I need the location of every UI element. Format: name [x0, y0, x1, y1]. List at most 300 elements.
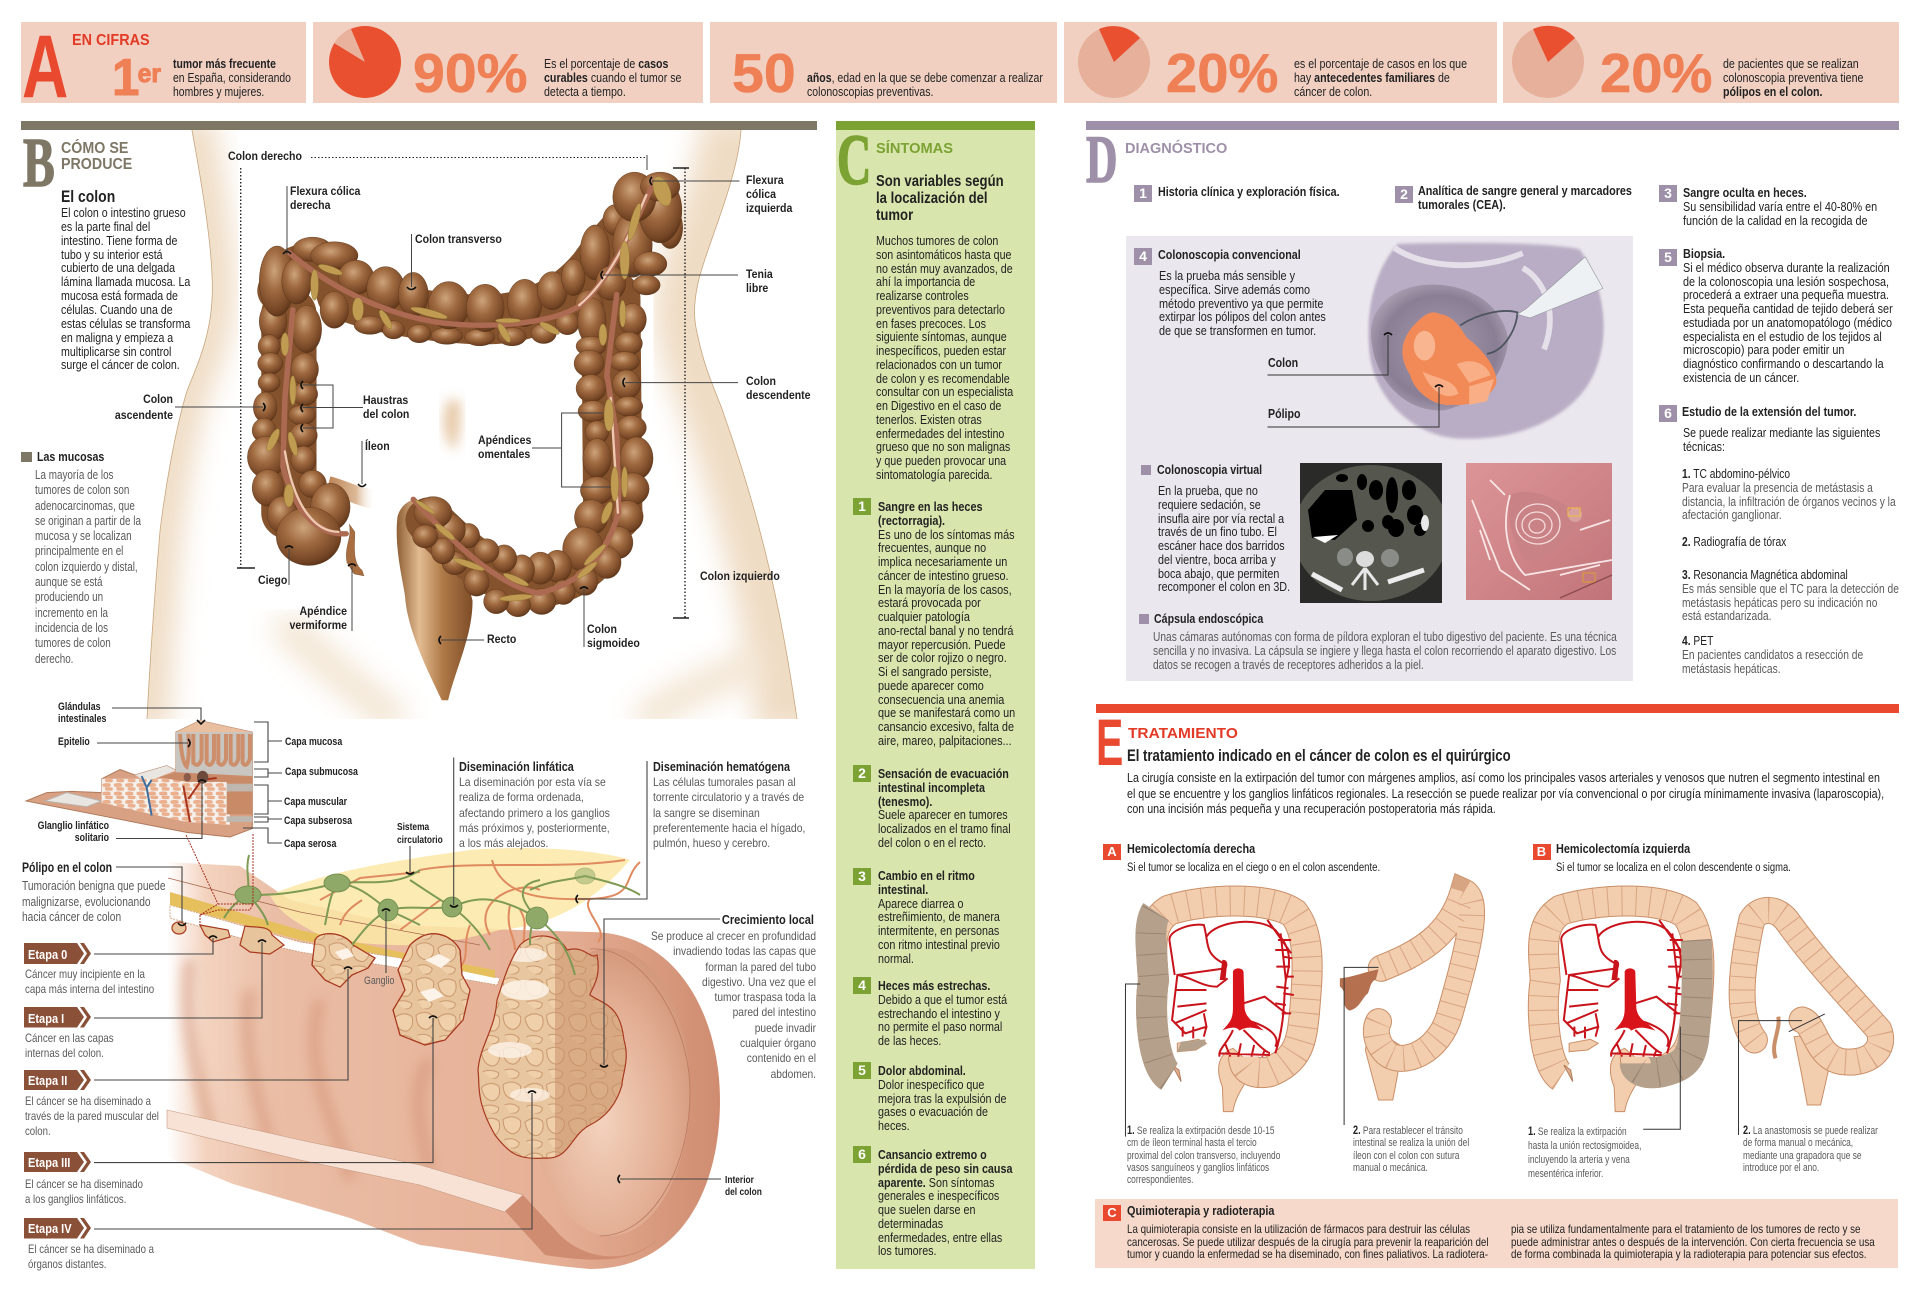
symptom 1: que se manifestará como un [878, 706, 1015, 720]
text diseminación hematógena: preferentemente hacia el hígado, [653, 821, 805, 835]
text crecimiento local: abdomen. [770, 1067, 816, 1081]
vessels [1169, 920, 1294, 1057]
text intro: de colon y es recomendable [876, 372, 1010, 386]
subheading: tumor [876, 207, 913, 224]
colon labels leader lines [175, 155, 740, 647]
text intro: son asintomáticos hasta que [876, 248, 1011, 262]
illustration: cross-section of colon with tumour stages [24, 708, 721, 1269]
apéndices omentales [264, 174, 675, 602]
diagram A1: right hemicolectomy [1152, 901, 1307, 1112]
badge etapa III: Etapa III [28, 1155, 70, 1170]
text crecimiento local: digestivo. Una vez que el [702, 975, 816, 989]
text técnicas: técnicas: [1683, 440, 1725, 454]
item sangre oculta: Sangre oculta en heces. [1683, 186, 1807, 200]
stat text pólipos: colonoscopia preventiva tiene [1723, 70, 1863, 85]
heading cómo se produce: CÓMO SE [61, 140, 128, 157]
number 5: 5 [1664, 249, 1672, 265]
text etapa III [25, 1177, 143, 1206]
text cápsula endoscópica: sencilla y no invasiva. La cápsula se ingiere y llega hasta el colon recorriendo el aparato digestivo. Los [1153, 644, 1616, 658]
stat text antecedentes familiares [1294, 56, 1467, 99]
text colonoscopia virtual: recomponer el colon en 3D. [1158, 580, 1290, 594]
label apéndices omentales [478, 433, 531, 461]
diagram B1: left hemicolectomy [1543, 901, 1699, 1112]
heading colonoscopia virtual: Colonoscopia virtual [1157, 463, 1262, 477]
symptom 3: con ritmo intestinal previo [878, 938, 1000, 952]
heading cómo se produce [61, 139, 132, 173]
text intro: enfermedades del intestino [876, 427, 1004, 441]
text etapa II: través de la pared muscular del [25, 1109, 159, 1123]
text intro: y que pueden provocar una [876, 454, 1006, 468]
text intro: realizarse controles [876, 289, 969, 303]
text el colon: es la parte final del [61, 220, 150, 234]
number 6 [1659, 405, 1677, 422]
label glanglio linfático solitario [38, 820, 109, 844]
symptom 1: Es uno de los síntomas más [878, 528, 1015, 542]
polyp [172, 922, 186, 934]
technique 1: distancia, la infiltración de órganos vecinos y la [1682, 494, 1896, 508]
text colonoscopia virtual: escáner hace dos barridos [1158, 539, 1284, 553]
number 3 [853, 868, 871, 885]
letter D: D [1086, 121, 1117, 197]
symptom 3: intestinal. [878, 883, 928, 897]
text tratamiento: el que se encuentre y los ganglios linfáticos regionales. La resección se puede realizar por vía convencional o por cirugía mínimamente invasiva (laparoscopia), [1127, 786, 1884, 800]
text el colon: tubo y su interior está [61, 248, 163, 262]
symptom 1: Si el sangrado persiste, [878, 665, 992, 679]
letter A square: A [1107, 844, 1117, 859]
symptom 1: ser de color rojizo o negro. [878, 651, 1007, 665]
text crecimiento local: puede invadir [754, 1021, 816, 1035]
text diseminación linfática: más próximos y, posteriormente, [459, 821, 610, 835]
stat text antecedentes familiares: cáncer de colon. [1294, 84, 1372, 99]
text el colon: mucosa está formada de [61, 289, 178, 303]
item sangre oculta: función de la calidad en la recogida de [1683, 214, 1868, 228]
caption B1: incluyendo la arteria y vena [1528, 1154, 1630, 1166]
symptom 1: Sangre en las heces [878, 500, 983, 514]
text diseminación hematógena: pulmón, hueso y cerebro. [653, 836, 770, 850]
caption B2: de forma manual o mecánica, [1743, 1137, 1853, 1149]
symptom 1: mayor repercusión. Puede [878, 638, 1006, 652]
text el colon: cubierto de una delgada [61, 261, 175, 275]
purple header bar [1086, 121, 1899, 130]
mucosal strip [167, 1110, 523, 1212]
label recto: Recto [487, 632, 516, 646]
number 6 [853, 1146, 871, 1163]
text el colon: estas células se transforma [61, 317, 190, 331]
text diseminación linfática: afectando primero a los ganglios [459, 806, 610, 820]
label apéndice vermiforme [289, 604, 347, 632]
symptom 1: cualquier patología [878, 610, 970, 624]
number 2 [853, 765, 871, 782]
text colonoscopia convencional: extirpar los pólipos del colon antes [1158, 310, 1325, 324]
number 6: 6 [1664, 405, 1672, 421]
heading hemicolectomía derecha: Hemicolectomía derecha [1126, 842, 1255, 856]
label apéndice vermiforme: vermiforme [289, 618, 347, 632]
label flexura cólica izquierda: cólica [746, 187, 775, 201]
caption A2: íleon con el colon con sutura [1353, 1150, 1459, 1162]
symptom 1: puede aparecer como [878, 679, 984, 693]
number 2: 2 [858, 765, 866, 781]
number 3 [1659, 185, 1677, 202]
symptom 6: generales e inespecíficos [878, 1189, 999, 1203]
label tenia libre: Tenia [746, 267, 772, 281]
number 2: 2 [1400, 186, 1408, 202]
stat 50: 50 [732, 43, 796, 104]
text crecimiento local: pared del intestino [732, 1005, 816, 1019]
stat text curables: Es el porcentaje de casos [544, 56, 668, 71]
item biopsia: estudiada por un anatomopatólogo (médico [1683, 316, 1892, 330]
text el colon: multiplicarse sin control [61, 345, 171, 359]
symptom 6: Cansancio extremo o [878, 1148, 987, 1162]
text etapa I: Cáncer en las capas [25, 1031, 114, 1045]
colon body backing [279, 203, 650, 585]
stat text curables [544, 56, 681, 99]
symptom 2: Sensación de evacuación [878, 767, 1009, 781]
square bullet las mucosas [21, 452, 32, 462]
symptom 3 [878, 869, 1000, 966]
label flexura cólica derecha: derecha [290, 198, 331, 212]
diagnosis leader lines [1268, 333, 1443, 427]
item analítica: tumorales (CEA). [1418, 198, 1506, 212]
label haustras del colon: Haustras [363, 393, 408, 407]
symptom 1: ano-rectal banal y no tendrá [878, 624, 1013, 638]
symptom 1: aire, mareo, palpitaciones... [878, 734, 1012, 748]
text las mucosas: tumores de colon [35, 636, 111, 650]
caption B2: 2. La anastomosis se puede realizar [1743, 1123, 1878, 1137]
heading las mucosas: Las mucosas [37, 450, 104, 464]
text etapa 0: capa más interna del intestino [25, 982, 154, 996]
ring of the tube end [530, 948, 690, 1236]
technique 4: 4. PET [1682, 634, 1713, 648]
number 5 [853, 1062, 871, 1079]
label colon ascendente: Colon [143, 392, 173, 406]
label interior del colon: Interior [725, 1174, 754, 1186]
label colon descendente: Colon [746, 374, 775, 388]
text las mucosas: aunque se está [35, 575, 103, 589]
text diseminación linfática: realiza de forma ordenada, [459, 790, 584, 804]
text las mucosas: mucosa y se localizan [35, 529, 132, 543]
item biopsia: microscopio) para poder emitir un [1683, 343, 1844, 357]
text etapa II: colon. [25, 1124, 51, 1138]
technique 3: metástasis hepáticas pero su indicación no [1682, 596, 1877, 610]
symptom 1: estará provocada por [878, 596, 981, 610]
text intro: ahí la importancia de [876, 275, 975, 289]
label apéndices omentales: Apéndices [478, 433, 531, 447]
text las mucosas: incidencia de los [35, 621, 108, 635]
text el colon: lámina llamada mucosa. La [61, 275, 190, 289]
number 1 [853, 498, 871, 515]
symptom 2: localizados en el tramo final [878, 822, 1011, 836]
text etapa II: El cáncer se ha diseminado a [25, 1094, 151, 1108]
text colonoscopia convencional: Es la prueba más sensible y [1158, 269, 1295, 283]
text tratamiento: La cirugía consiste en la extirpación del tumor con márgenes amplios, así como los principales vasos arteriales y venosos que nutren el segmento intestinal en [1127, 770, 1880, 785]
label capa muscular: Capa muscular [284, 796, 347, 808]
caption B2: introduce por el ano. [1743, 1162, 1819, 1174]
caption A2 [1353, 1124, 1469, 1174]
red dotted zoom lines [186, 834, 253, 925]
tumours [172, 922, 470, 1045]
label sistema circulatorio: circulatorio [397, 834, 443, 846]
panel: tratamiento [1095, 704, 1899, 1269]
technique 3: está estandarizada. [1682, 609, 1771, 623]
letter B square: B [1537, 844, 1546, 859]
caption A2: intestinal se realiza la unión del [1353, 1137, 1469, 1149]
text colonoscopia virtual: En la prueba, que no [1158, 484, 1257, 498]
text las mucosas: colon izquierdo y distal, [35, 560, 138, 574]
technique 3: Es más sensible que el TC para la detección de [1682, 582, 1899, 596]
caption A1: vasos sanguíneos y ganglios linfáticos [1127, 1162, 1269, 1174]
number 5: 5 [858, 1062, 866, 1078]
symptom 6: determinadas [878, 1217, 943, 1231]
text etapa IV: El cáncer se ha diseminado a [28, 1242, 154, 1256]
panel: síntomas [836, 121, 1035, 1269]
label flexura cólica izquierda [746, 173, 792, 214]
stat text curables: detecta a tiempo. [544, 84, 626, 99]
diagram leaders [1125, 967, 1802, 1137]
technique 1: afectación ganglionar. [1682, 508, 1782, 522]
text el colon: células. Cuando una de [61, 303, 173, 317]
heading crecimiento local: Crecimiento local [722, 912, 814, 927]
text diseminación hematógena: Diseminación hematógena [653, 760, 790, 774]
label flexura cólica izquierda: izquierda [746, 200, 792, 214]
text intro: inespecíficos, pueden estar [876, 344, 1006, 358]
symptom 5: mejora tras la expulsión de [878, 1092, 1006, 1106]
symptom 2: (tenesmo). [878, 794, 932, 808]
square bullet cápsula endoscópica [1139, 614, 1149, 624]
label capa serosa: Capa serosa [284, 838, 336, 850]
caption B1: mesentérica inferior. [1528, 1168, 1603, 1180]
text intro [876, 234, 1014, 482]
text intro: Muchos tumores de colon [876, 234, 998, 248]
heading cápsula endoscópica: Cápsula endoscópica [1154, 612, 1263, 626]
text etapa I [25, 1031, 114, 1060]
text quimioterapia column 1: tumor y cuando la enfermedad se ha diseminado, con fines paliativos. La radiotera- [1127, 1247, 1488, 1261]
heading colonoscopia convencional: Colonoscopia convencional [1158, 248, 1300, 262]
text las mucosas: incremento en la [35, 606, 108, 620]
item biopsia: Biopsia. [1683, 247, 1725, 261]
text diseminación linfática: La diseminación por esta vía se [459, 775, 606, 789]
subheading [876, 173, 1004, 224]
symptom 4: no permite el paso normal [878, 1020, 1002, 1034]
caption A2: 2. Para restablecer el tránsito [1353, 1123, 1463, 1137]
text colonoscopia convencional: específica. Sirve además como [1158, 283, 1310, 297]
stat text pólipos: pólipos en el colon. [1723, 84, 1823, 99]
label colon descendente: descendente [746, 388, 810, 402]
technique 1 [1682, 468, 1896, 523]
text intro: tenerlos. Existen otras [876, 413, 982, 427]
texture of stage II and III tumours [312, 934, 470, 1045]
text etapa III: El cáncer se ha diseminado [25, 1177, 143, 1191]
stat text tumor más frecuente: en España, considerando [173, 70, 291, 85]
symptom 1: implica necesariamente un [878, 555, 1007, 569]
symptom 2: del colon o en el recto. [878, 836, 986, 850]
heading en cifras: EN CIFRAS [72, 32, 150, 49]
technique 4: metástasis hepáticas. [1682, 662, 1781, 676]
symptom 3: Aparece diarrea o [878, 896, 963, 910]
label colon ascendente [115, 392, 173, 422]
diagram A2: anastomosis [1340, 892, 1472, 1100]
heading síntomas: SÍNTOMAS [876, 141, 953, 157]
text diseminación linfática [459, 760, 610, 850]
text crecimiento local: contenido en el [746, 1051, 816, 1065]
label sistema circulatorio [397, 821, 443, 846]
stage IV tumour [478, 936, 616, 1158]
symptom 1: En la mayoría de los casos, [878, 582, 1012, 596]
text cápsula endoscópica: datos se recogen a través de receptores adheridos a la piel. [1153, 658, 1424, 672]
tube folds [187, 960, 430, 1180]
caption B1: 1. Se realiza la extirpación [1528, 1124, 1627, 1138]
item sangre oculta [1683, 187, 1877, 228]
symptom 6: los tumores. [878, 1244, 937, 1258]
letter A: A [22, 16, 68, 116]
caption A1: correspondientes. [1127, 1174, 1193, 1186]
text etapa III: a los ganglios linfáticos. [25, 1192, 126, 1206]
label glanglio linfático solitario: solitario [75, 832, 109, 844]
text cápsula endoscópica [1153, 631, 1617, 672]
text el colon: surge el cáncer de colon. [61, 358, 180, 372]
label colon transverso: Colon transverso [415, 232, 502, 246]
text crecimiento local: forman la pared del tubo [705, 960, 816, 974]
caption A1: 1. Se realiza la extirpación desde 10-15 [1127, 1123, 1274, 1137]
text las mucosas: tumores de colon son [35, 483, 129, 497]
symptom 3: intermitente, en personas [878, 924, 999, 938]
letter C: C [837, 120, 871, 200]
label colon: Colon [1268, 356, 1298, 370]
symptom 3: Cambio en el ritmo [878, 869, 975, 883]
label flexura cólica derecha: Flexura cólica [290, 184, 360, 198]
technique 1: Para evaluar la presencia de metástasis a [1682, 481, 1873, 495]
text diseminación linfática: Diseminación linfática [459, 760, 574, 774]
item biopsia: existencia de un cáncer. [1683, 371, 1799, 385]
green header bar [836, 121, 1035, 130]
label flexura cólica izquierda: Flexura [746, 173, 783, 187]
label colon descendente [746, 374, 810, 402]
number 1: 1 [1139, 185, 1147, 201]
text colonoscopia virtual: boca abajo, que permiten [1158, 566, 1279, 580]
text las mucosas: se originan a partir de la [35, 514, 141, 528]
number 1: 1 [858, 498, 866, 514]
heading cómo se produce: PRODUCE [61, 156, 132, 173]
text las mucosas: produciendo un [35, 590, 103, 604]
text las mucosas: La mayoría de los [35, 468, 113, 482]
text crecimiento local: invadiendo todas las capas que [673, 944, 816, 958]
text hemicolectomía izquierda: Si el tumor se localiza en el colon descendente o sigma. [1556, 862, 1791, 874]
symptom 4 [878, 979, 1008, 1048]
stage II [312, 934, 375, 987]
symptom 4: estrechando el intestino y [878, 1006, 1000, 1020]
symptom 6 [878, 1148, 1013, 1258]
letter E: E [1096, 705, 1123, 779]
label íleon: Íleon [365, 439, 390, 453]
label apéndice vermiforme: Apéndice [299, 604, 347, 618]
badge etapa I: Etapa I [28, 1011, 64, 1026]
stat text tumor más frecuente [173, 56, 291, 99]
text hemicolectomía derecha: Si el tumor se localiza en el ciego o en el colon ascendente. [1127, 862, 1380, 874]
colon [247, 172, 683, 700]
text tratamiento: con una incisión más pequeña y una recuperación postoperatoria más rápida. [1127, 801, 1496, 816]
stage I [240, 926, 284, 954]
symptom 2: intestinal incompleta [878, 781, 985, 795]
label haustras del colon: del colon [363, 407, 409, 421]
stat text curables: curables cuando el tumor se [544, 70, 681, 85]
item biopsia: procederá a extraer una pequeña muestra. [1683, 288, 1889, 302]
item biopsia [1683, 248, 1893, 386]
letter B square [1532, 844, 1550, 860]
subheading: la localización del [876, 190, 988, 207]
item biopsia: Esta pequeña cantidad de tejido deberá ser [1683, 302, 1893, 316]
text diseminación hematógena: la sangre se diseminan [653, 806, 760, 820]
text el colon: en maligna y empieza a [61, 331, 173, 345]
symptom 4: Debido a que el tumor está [878, 993, 1007, 1007]
stat 20% pólipos: 20% [1600, 43, 1712, 104]
text pólipo en el colon: malignizarse, evolucionando [22, 894, 151, 908]
text etapa I: internas del colon. [25, 1046, 104, 1060]
colonoscopy illustration [1368, 243, 1604, 439]
caption A1 [1127, 1124, 1280, 1186]
text quimioterapia column 1: La quimioterapia consiste en la utilización de fármacos para destruir las células [1127, 1222, 1470, 1236]
text colonoscopia virtual: del vientre, boca arriba y [1158, 553, 1275, 567]
number 3: 3 [858, 868, 866, 884]
tissue block [26, 721, 252, 837]
item estudio extensión: Estudio de la extensión del tumor. [1682, 405, 1856, 419]
rectum [397, 499, 473, 700]
caption A1: cm de íleon terminal hasta el tercio [1127, 1137, 1257, 1149]
symptom 2: Suele aparecer en tumores [878, 808, 1008, 822]
label colon izquierdo: Colon izquierdo [700, 569, 780, 583]
text pólipo en el colon: hacia cáncer de colon [22, 910, 121, 924]
label flexura cólica derecha [290, 184, 360, 212]
badge etapa IV: Etapa IV [28, 1221, 72, 1236]
text quimioterapia column 1: cancerosas. Se puede utilizar después de la cirugía para prevenir la reaparición del [1127, 1235, 1489, 1249]
label ganglio: Ganglio [364, 975, 394, 987]
letter A square [1103, 844, 1121, 860]
text etapa II [25, 1094, 159, 1138]
item biopsia: diagnóstico confirmando o descartando la [1683, 357, 1884, 371]
symptom 3: normal. [878, 952, 914, 966]
letter C square [1103, 1205, 1121, 1221]
text intro: siguiente síntomas, aunque [876, 330, 1007, 344]
text intro: grueso que no son malignas [876, 440, 1010, 454]
text el colon [61, 206, 190, 372]
heading diagnóstico: DIAGNÓSTICO [1125, 141, 1227, 157]
heading quimioterapia: Quimioterapia y radioterapia [1127, 1204, 1274, 1218]
technique 2: 2. Radiografía de tórax [1682, 535, 1786, 549]
symptom 4: de las heces. [878, 1034, 941, 1048]
stat text pólipos: de pacientes que se realizan [1723, 56, 1859, 71]
chemotherapy box background [1095, 1199, 1898, 1268]
text diseminación linfática: a los más alejados. [459, 836, 548, 850]
text etapa IV: órganos distantes. [28, 1257, 106, 1271]
text las mucosas: adenocarcinomas, que [35, 499, 135, 513]
fat band and vessels [168, 848, 640, 985]
stat text tumor más frecuente: tumor más frecuente [173, 56, 276, 71]
label tenia libre [746, 267, 773, 295]
label glándulas intestinales: Glándulas [58, 701, 101, 713]
text colonoscopia convencional: método preventivo ya que permite [1158, 296, 1323, 310]
stat text antecedentes familiares: hay antecedentes familiares de [1294, 70, 1450, 85]
stage badges [24, 943, 91, 1238]
technique 4: En pacientes candidatos a resección de [1682, 648, 1863, 662]
symptom 6: aparente. Son síntomas [878, 1176, 995, 1190]
CT scan [1293, 463, 1449, 603]
text el colon: El colon o intestino grueso [61, 206, 186, 220]
text intro: en fases precoces. Los [876, 317, 986, 331]
stat text años: años, edad en la que se debe comenzar a realizar [807, 70, 1043, 85]
text diseminación hematógena: torrente circulatorio y a través de [653, 790, 804, 804]
symptom 6: que suelen darse en [878, 1203, 975, 1217]
text diseminación hematógena: Las células tumorales pasan al [653, 775, 796, 789]
number 2 [1395, 186, 1413, 203]
panel: cómo se produce [21, 121, 817, 1271]
